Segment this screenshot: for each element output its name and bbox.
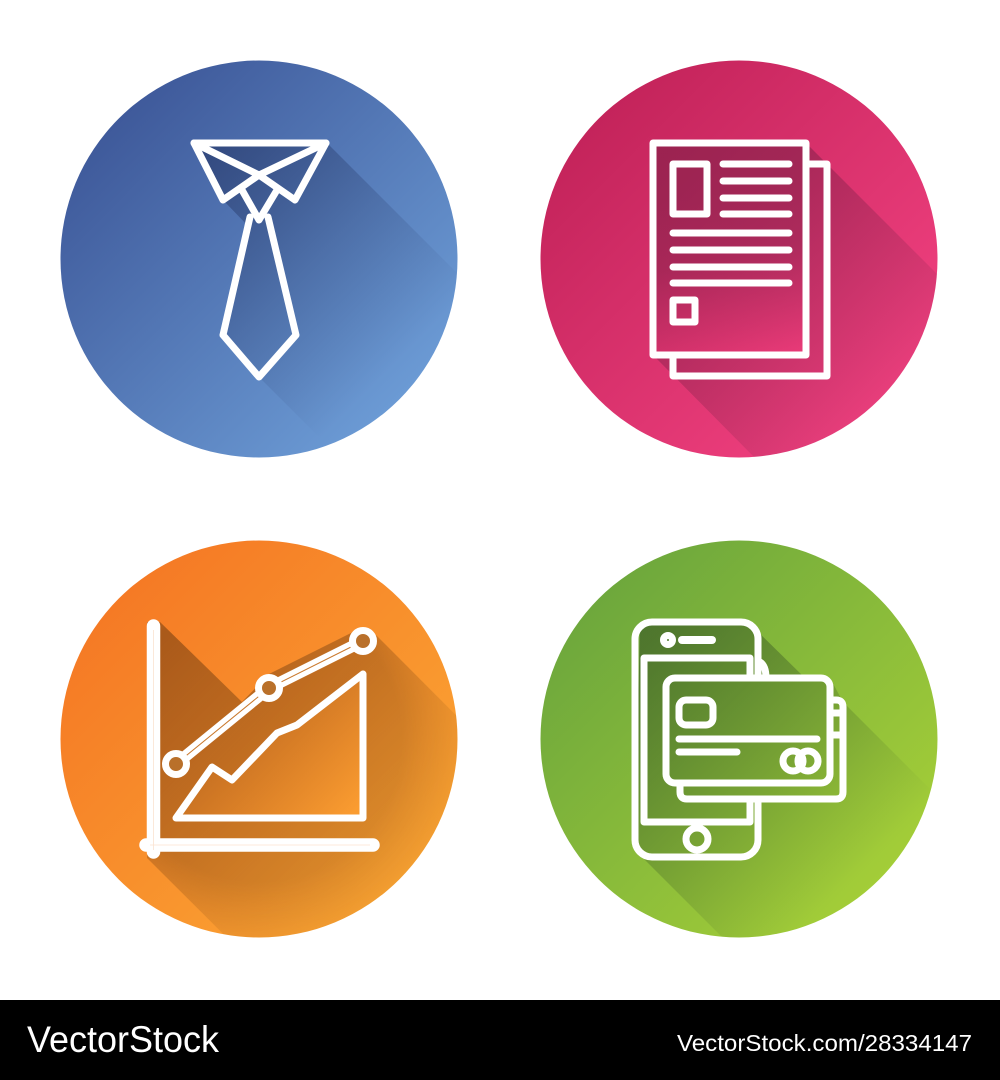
blue circle — [60, 60, 458, 458]
icon: document pages — [653, 143, 827, 376]
credit card — [666, 678, 830, 783]
trend points — [166, 630, 374, 774]
chart axes — [146, 626, 373, 852]
icon: phone and credit card — [635, 622, 843, 857]
image id: VectorStock.com/28334147 — [677, 1030, 972, 1056]
long shadow of chart — [147, 622, 458, 938]
footer banner — [0, 1000, 1000, 1080]
area — [176, 674, 363, 818]
brand name: VectorStock — [27, 1019, 219, 1060]
long shadow of document — [656, 146, 937, 457]
panel: blue tie badge — [60, 60, 458, 458]
pink circle — [540, 60, 938, 458]
orange circle — [60, 540, 458, 938]
panel: pink document badge — [540, 60, 938, 458]
panel: green mobile payment badge — [540, 540, 938, 938]
trend line — [176, 641, 363, 764]
green circle — [540, 540, 938, 938]
icon: growth chart — [146, 626, 374, 852]
panel: orange chart badge — [60, 540, 458, 938]
long shadow of tie — [202, 145, 438, 406]
phone — [635, 622, 758, 857]
long shadow of phone and card — [638, 622, 908, 938]
icon: necktie — [194, 143, 326, 377]
